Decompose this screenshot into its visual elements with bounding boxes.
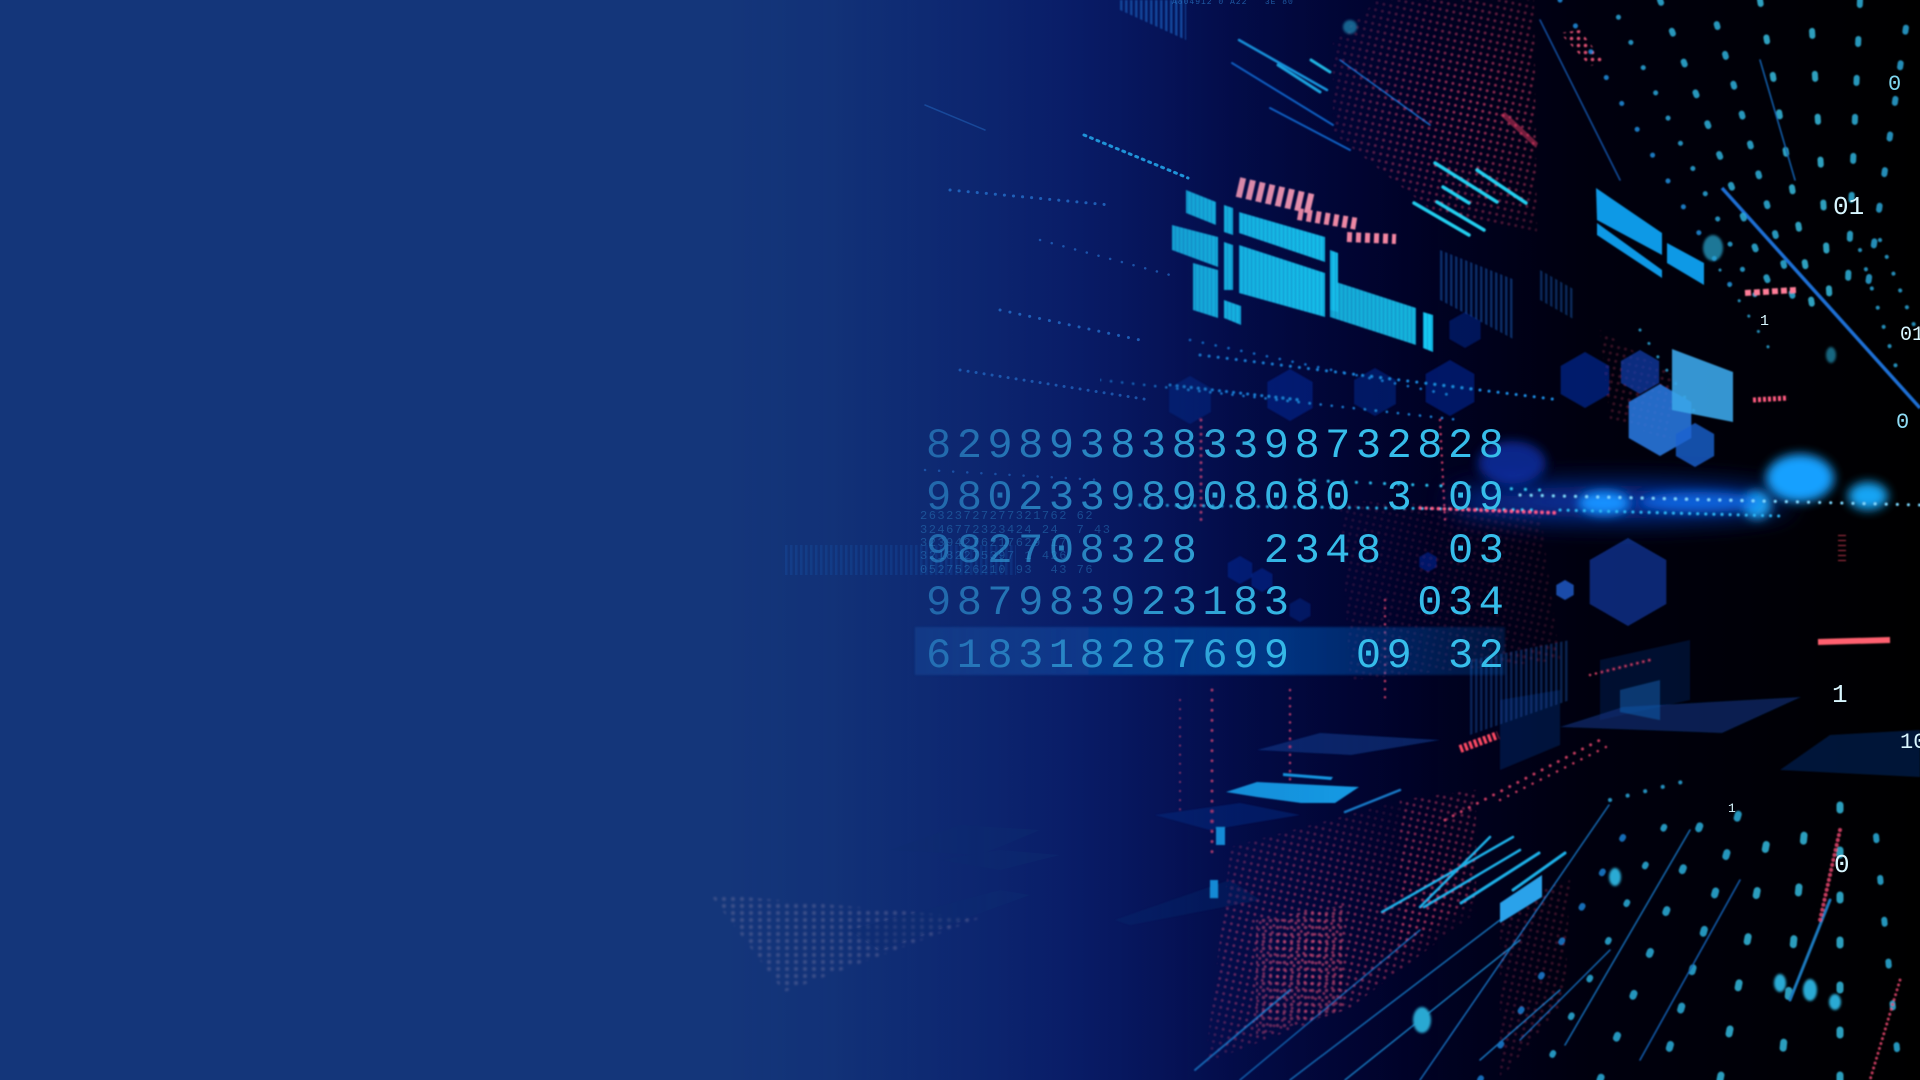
numeric data rows: 98023398908080 3 09 xyxy=(926,474,1509,522)
chart-like grid: dim stripes xyxy=(1120,0,1690,770)
hot red-white dotted bars xyxy=(1238,187,1890,749)
long diagonal beam xyxy=(1722,188,1920,408)
soft scene wrapper xyxy=(1100,0,1920,1080)
cyan data blocks xyxy=(1172,190,1433,352)
cyan panels upper right xyxy=(1596,188,1704,285)
binary digit labels: 1 xyxy=(1728,801,1736,816)
faint dark panels on navy xyxy=(850,825,1060,950)
binary digit labels: 01 xyxy=(1833,192,1864,222)
hexagon cluster xyxy=(1169,312,1714,626)
numeric data rows xyxy=(926,422,1509,680)
panel: red halftone towers xyxy=(1205,0,1680,1080)
cyan panel over hexagons xyxy=(1672,349,1733,422)
binary digit labels: 0 xyxy=(1896,410,1909,435)
numeric data rows: 8298938383398732828 xyxy=(926,422,1509,470)
data band xyxy=(915,627,1505,675)
numeric data rows: 618318287699 09 32 xyxy=(926,632,1509,680)
background scene xyxy=(713,0,1920,1080)
small faint digit block: 26323727277321762 62 xyxy=(920,509,1094,523)
faint halftone floor on navy xyxy=(710,894,980,992)
fade overlay from navy xyxy=(0,0,1440,1080)
numeric data rows: 982708328 2348 03 xyxy=(926,527,1509,575)
dotted red trails xyxy=(1180,420,1900,1080)
blurred particles xyxy=(1343,20,1841,1033)
binary digit labels: 0 xyxy=(1888,72,1901,97)
dark scene base xyxy=(700,0,1920,1080)
small faint digit block: 0527526210 93 43 76 xyxy=(920,563,1094,577)
binary digit labels: 1 xyxy=(1832,680,1848,710)
binary digit labels: 0 xyxy=(1834,850,1850,880)
numeric data rows: 987983923183 034 xyxy=(926,579,1509,627)
small faint digit block: 32182275397 1 426 xyxy=(920,549,1068,563)
faint vertical stripes block xyxy=(784,545,1016,575)
small faint digit block: 3246772323424 24 7 43 xyxy=(920,523,1111,537)
glowing horizontal data stream xyxy=(1100,340,1920,519)
binary digit labels xyxy=(1728,72,1920,880)
small faint digit block xyxy=(920,509,1111,577)
bright cyan floor tiles xyxy=(1210,773,1542,923)
small faint digit block: 32394276217629 17 xyxy=(920,536,1068,550)
dim floating floor panels xyxy=(1115,680,1920,925)
binary digit labels: 1 xyxy=(1760,313,1769,330)
binary particle streams upper right xyxy=(1540,0,1920,420)
faint dotted blue lines on navy xyxy=(925,105,1188,480)
bright cyan streaks xyxy=(1232,40,1565,912)
binary particle streams lower right xyxy=(1195,780,1900,1080)
